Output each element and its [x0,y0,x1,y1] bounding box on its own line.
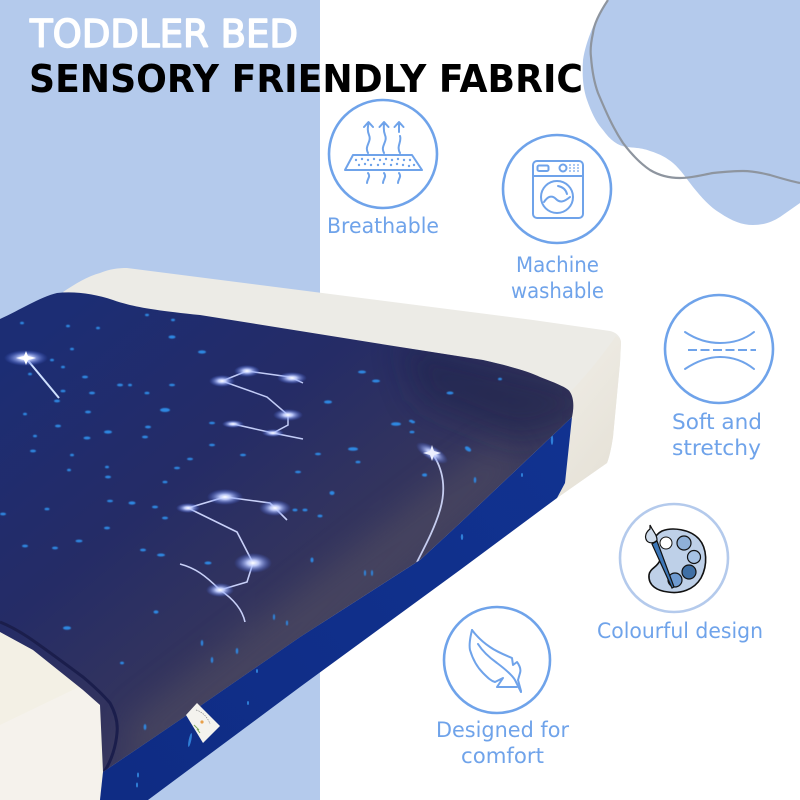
mattress near corner side face [0,685,100,800]
blue skirt of the sheet [100,417,572,800]
toddler bed photo [0,268,621,800]
constellation, upper [209,365,307,439]
label [672,410,762,460]
background: left blue panel [0,0,320,800]
feature: breathable [327,100,439,238]
icon: breathable fabric [329,100,437,208]
mattress far side shading [557,336,621,498]
icon: feather [444,607,550,713]
label: Soft and [672,410,762,434]
title line one: TODDLER BED [29,12,298,56]
small stars [0,314,502,730]
title [29,12,583,101]
starry blanket [0,280,600,780]
mattress cream top and far side [63,268,621,560]
label: Machine [516,253,599,277]
sewn-in fabric label [186,703,220,743]
label: comfort [461,744,544,768]
label: stretchy [672,436,761,460]
skirt stars [136,434,553,788]
label: Designed for [436,718,569,742]
label [436,718,569,768]
feature: colourful design [597,504,763,643]
constellation, lower [176,489,291,622]
decorative blue blob [583,0,800,225]
label: Colourful design [597,619,763,643]
blanket base [0,280,600,780]
feature: machine washable [503,135,611,303]
stitched hem [0,622,117,772]
feature: soft and stretchy [665,295,773,460]
feature: designed for comfort [436,607,569,768]
mattress near corner [0,630,110,800]
decorative grey curve [591,0,800,183]
label: washable [511,279,604,303]
label: Breathable [327,214,439,238]
label [511,253,604,303]
icon: paint palette [620,504,728,612]
icon: washing machine [503,135,611,243]
dark back-right corner [404,348,574,440]
shooting star, right [416,442,447,562]
grey sheen along front fold [137,462,495,746]
title line two: SENSORY FRIENDLY FABRIC [29,57,583,101]
shooting star, left [4,350,59,398]
icon: stretch [665,295,773,403]
